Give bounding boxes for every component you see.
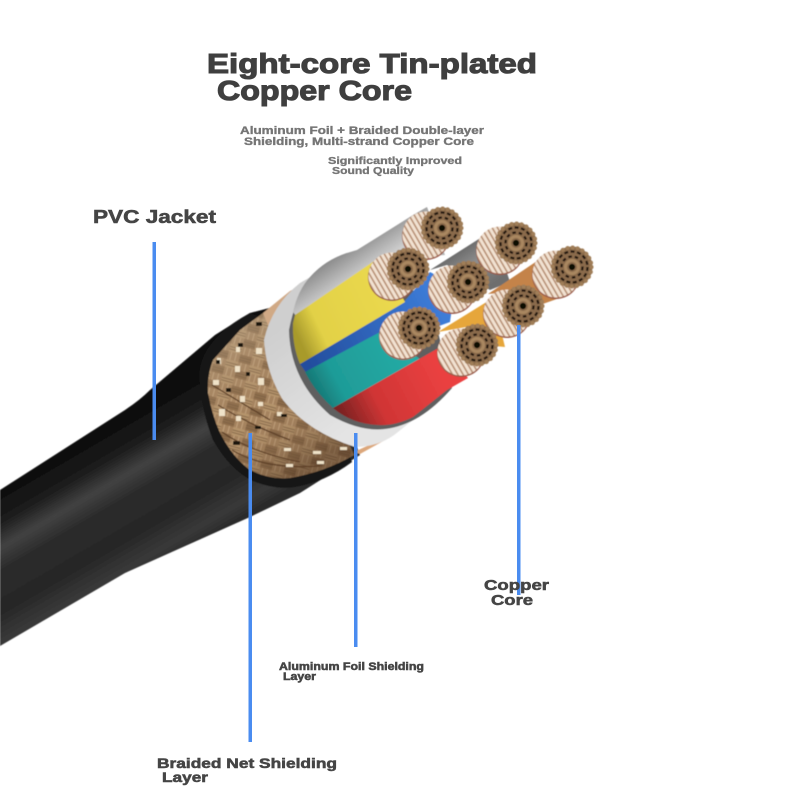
copper core: white wire: [402, 208, 462, 260]
leader line: braided net: [248, 433, 252, 742]
blue insulated wire: [300, 272, 455, 374]
label: aluminum foil shielding layer: Layer: [283, 671, 317, 683]
subtitle: shielding description: [240, 125, 485, 148]
jacket inner dark ring: [199, 313, 352, 488]
subtitle: shielding description: Shielding, Multi-strand Copper Core: [244, 136, 474, 148]
title: Eight-core Tin-plated: [207, 48, 537, 79]
copper core: grey wire: [476, 222, 536, 275]
red insulated wire: [333, 346, 468, 425]
copper core: teal wire: [379, 308, 440, 360]
white insulated wire: [293, 207, 445, 316]
gold insulated wire: [438, 298, 505, 347]
braided net shielding: [208, 284, 395, 478]
yellow insulated wire: [293, 257, 405, 364]
leader line: copper core: [517, 325, 520, 595]
label: braided net shielding layer: [157, 755, 337, 785]
leader line: PVC jacket: [152, 242, 156, 440]
label: copper core: [484, 577, 549, 609]
leader line: aluminum foil: [354, 433, 358, 647]
copper core: gold wire: [483, 286, 544, 338]
label: braided net shielding layer: Braided Net Shielding: [157, 755, 337, 771]
title: [207, 48, 537, 106]
label: copper core: Core: [491, 592, 533, 609]
conductor bundle rim: [289, 253, 452, 429]
copper core: orange wire: [532, 246, 592, 299]
aluminum foil shielding: [264, 260, 450, 447]
teal insulated wire: [305, 331, 424, 408]
title: Copper Core: [217, 75, 412, 106]
label: PVC jacket: PVC Jacket: [93, 207, 216, 227]
PVC jacket: [0, 300, 360, 646]
subtitle: sound quality: Significantly Improved: [328, 155, 462, 167]
subtitle: sound quality: Sound Quality: [332, 165, 414, 177]
label: aluminum foil shielding layer: Aluminum Foil Shielding: [279, 661, 424, 673]
subtitle: shielding description: Aluminum Foil + Braided Double-layer: [240, 125, 485, 137]
copper core: red wire: [437, 324, 498, 377]
subtitle: sound quality: [328, 155, 462, 177]
copper core: blue wire: [428, 262, 488, 314]
grey insulated wire: [430, 230, 510, 290]
label: aluminum foil shielding layer: [279, 661, 424, 683]
label: braided net shielding layer: Layer: [162, 769, 209, 785]
copper-orange insulated wire: [488, 257, 568, 305]
cable illustration: [0, 207, 592, 646]
copper core: yellow wire: [368, 248, 428, 301]
label: copper core: Copper: [484, 577, 549, 594]
